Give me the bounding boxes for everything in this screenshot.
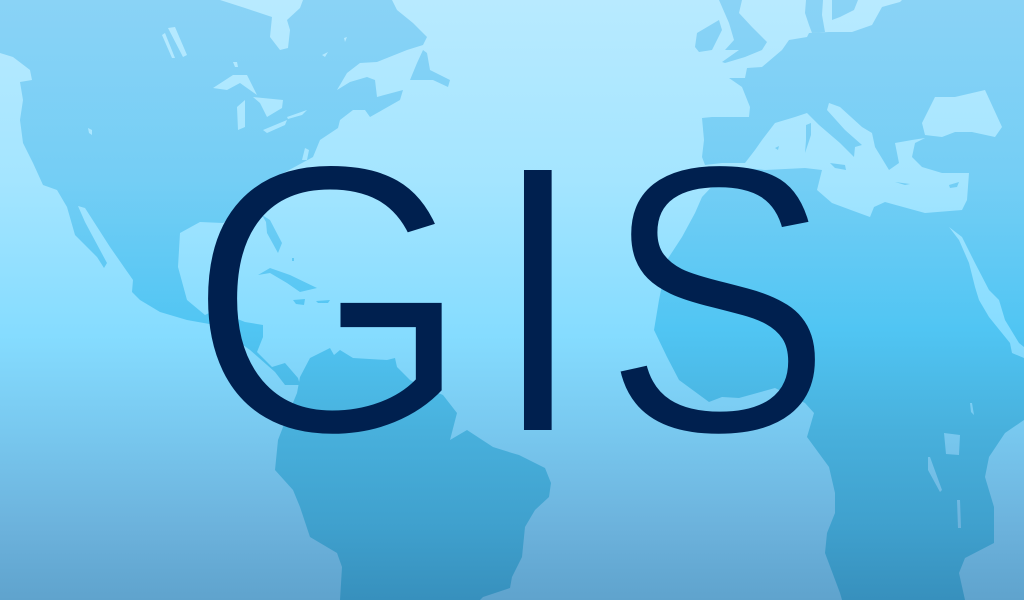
map: Ireland [695, 20, 722, 52]
map: Europe, Asia and Africa [654, 0, 1024, 600]
letter S: S [602, 83, 834, 515]
map: Caribbean islands [258, 258, 330, 305]
map: Mediterranean islands [775, 123, 959, 188]
map: Great Britain [719, 0, 767, 63]
map: Florida [262, 215, 282, 253]
map: South America [275, 348, 551, 600]
title: GIS [208, 166, 815, 434]
map: North and Central America [0, 0, 427, 385]
map: Newfoundland [410, 50, 450, 87]
letter G: G [187, 83, 472, 515]
map: Denmark and Scandinavia [805, 0, 858, 33]
letter I: I [488, 83, 587, 515]
